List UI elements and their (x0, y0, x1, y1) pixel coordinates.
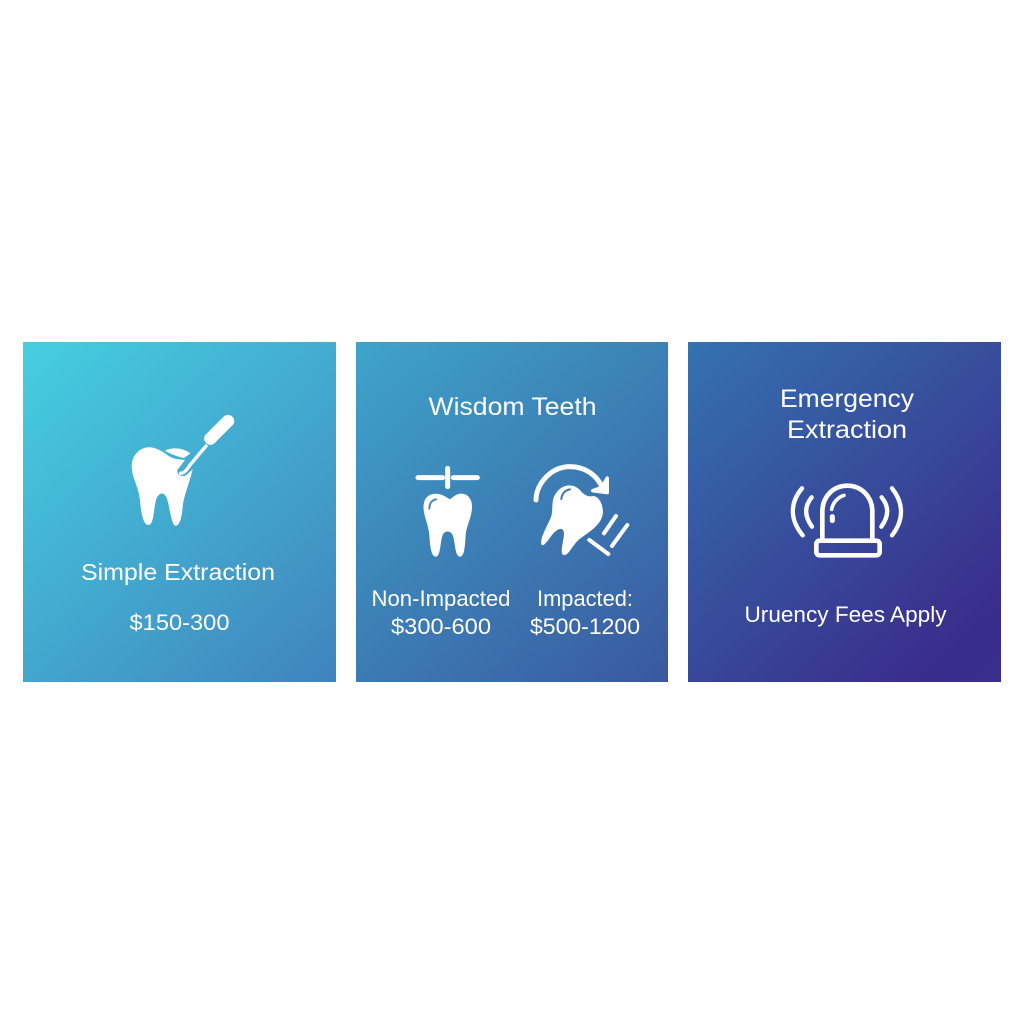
panel: emergency extraction (688, 342, 1001, 682)
heading: emergency extraction: Extraction (787, 416, 907, 444)
icon: tooth with dental tool (132, 421, 228, 526)
label: impacted price: $500-1200 (530, 614, 640, 639)
label: non-impacted price (372, 586, 510, 639)
price: simple extraction: $150-300 (130, 610, 230, 635)
label: non-impacted price: $300-600 (391, 614, 491, 639)
panel: simple extraction (23, 342, 336, 682)
icon: emergency siren (793, 486, 901, 555)
icon: impacted tooth with rotation arrow (536, 467, 627, 555)
note: urgency fees: Uruency Fees Apply (744, 602, 946, 627)
heading: emergency extraction (780, 385, 915, 444)
label: impacted price: Impacted: (537, 586, 633, 611)
label: non-impacted price: Non-Impacted (372, 586, 510, 611)
label: impacted price (530, 586, 640, 639)
heading: emergency extraction: Emergency (780, 385, 915, 413)
heading: simple extraction: Simple Extraction (81, 559, 275, 585)
heading: wisdom teeth: Wisdom Teeth (428, 393, 596, 421)
icon: non-impacted tooth with level line (418, 468, 477, 557)
panel: wisdom teeth (356, 342, 668, 682)
